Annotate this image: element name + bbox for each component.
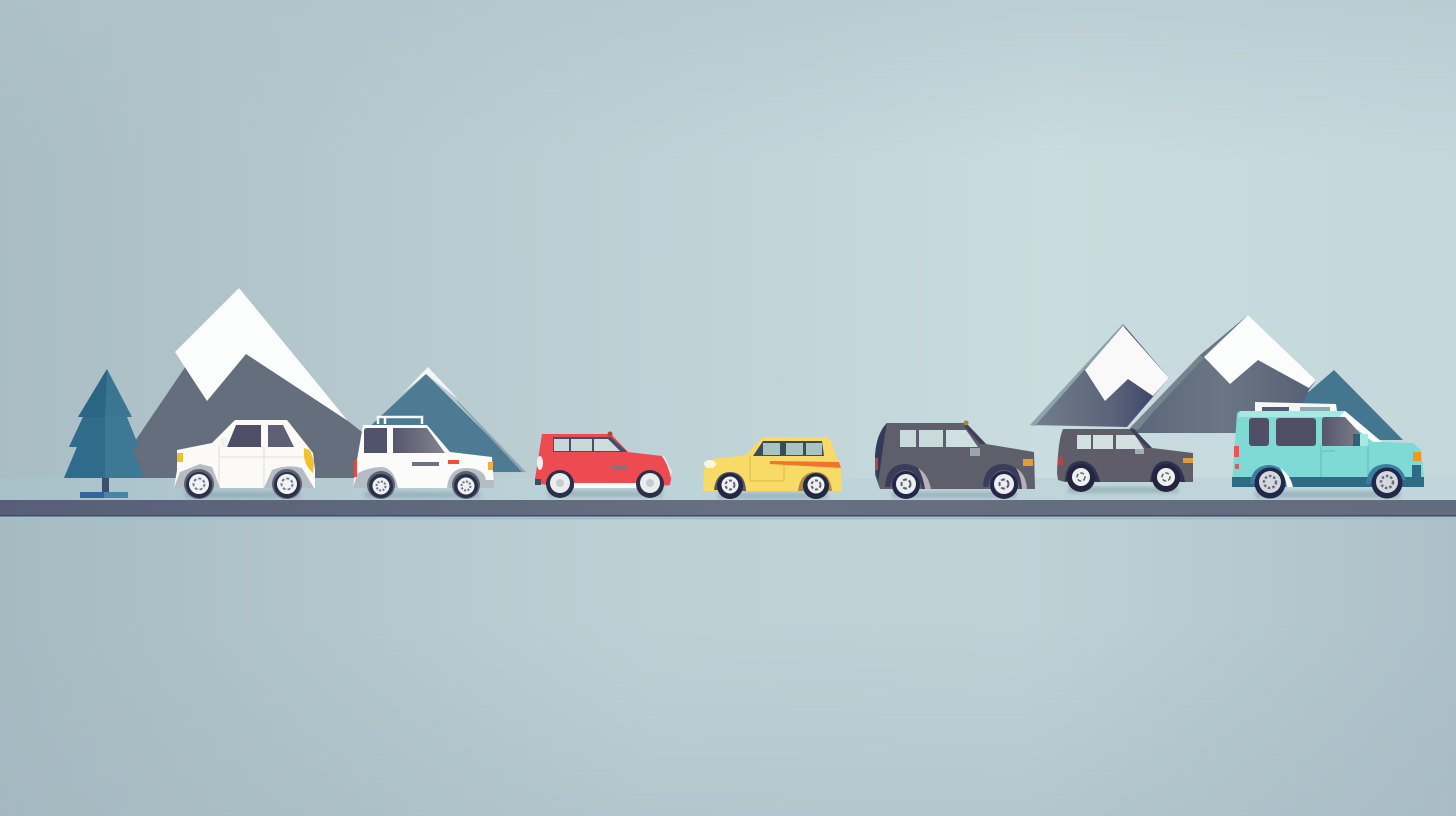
car 3: red hatchback bbox=[535, 432, 672, 498]
wheels bbox=[546, 470, 664, 498]
soft car shadows bbox=[185, 487, 1400, 499]
wheels bbox=[367, 471, 480, 499]
wheels bbox=[892, 471, 1018, 499]
tree bbox=[64, 369, 144, 498]
road bbox=[0, 500, 1456, 520]
left small blue mountain bbox=[365, 367, 526, 472]
left large mountain bbox=[110, 288, 372, 478]
wheels bbox=[184, 469, 302, 499]
car 7: teal van with roof rack bbox=[1232, 402, 1424, 498]
car 2: white SUV with roof rack bbox=[353, 417, 494, 499]
car 4: yellow wagon bbox=[703, 437, 842, 499]
wheels bbox=[1254, 468, 1402, 498]
car 1: white hatchback bbox=[174, 420, 315, 499]
right mountain with snow cap bbox=[1030, 324, 1169, 427]
right central mountain bbox=[1128, 315, 1316, 433]
ground strip bbox=[0, 478, 1456, 500]
car 5: large dark grey SUV bbox=[875, 420, 1035, 499]
blue mountain behind the van bbox=[1290, 370, 1403, 440]
wheels bbox=[717, 473, 829, 499]
wheels bbox=[1067, 464, 1180, 492]
car 6: small dark grey SUV bbox=[1057, 428, 1193, 492]
